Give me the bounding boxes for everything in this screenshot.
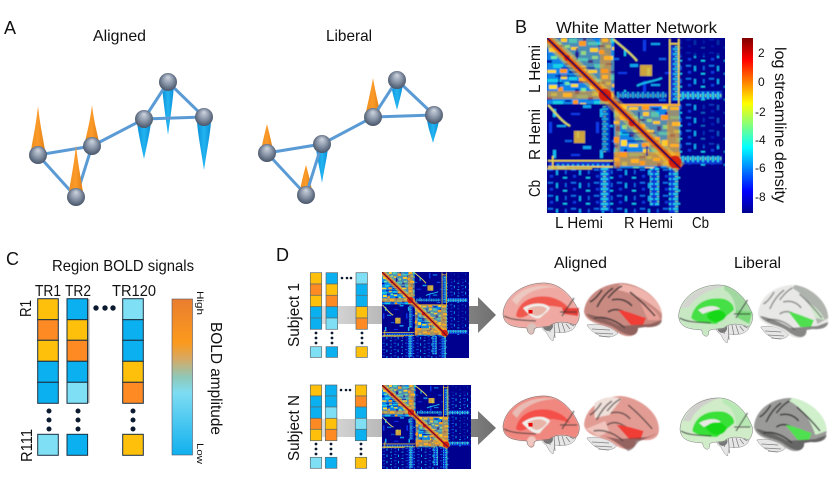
subject N signal columns bbox=[310, 385, 367, 468]
column labels bbox=[35, 283, 156, 300]
panel letter A: A bbox=[4, 18, 16, 38]
y axis labels bbox=[527, 45, 544, 197]
subject 1 label: Subject 1 bbox=[286, 283, 303, 347]
heading: Aligned: Aligned bbox=[554, 255, 607, 272]
scale end labels bbox=[195, 291, 205, 465]
subject 1 ellipsis dots bbox=[315, 277, 363, 344]
heading: White Matter Network: White Matter Network bbox=[556, 20, 718, 37]
heading: Region BOLD signals: Region BOLD signals bbox=[52, 258, 194, 275]
brains: subject 1 aligned bbox=[503, 283, 662, 341]
subject 1 signal columns bbox=[310, 273, 367, 357]
BOLD amplitude scale bbox=[172, 299, 192, 455]
y axis labels: R Hemi bbox=[527, 109, 544, 160]
time series columns bbox=[38, 299, 143, 455]
column labels: TR1 bbox=[35, 283, 61, 300]
colour bar tick labels: -8 bbox=[755, 190, 766, 204]
panel letter B: B bbox=[515, 17, 527, 37]
colour bar tick labels: -2 bbox=[755, 105, 766, 119]
scale end labels: Low bbox=[195, 443, 205, 465]
column labels: TR2 bbox=[65, 283, 91, 300]
row labels: R111 bbox=[19, 429, 36, 462]
row labels: R1 bbox=[18, 300, 35, 317]
colour bar tick labels: -6 bbox=[755, 161, 766, 175]
heading: Aligned: Aligned bbox=[93, 28, 146, 45]
colour bar tick labels: 0 bbox=[758, 75, 765, 89]
subject 1 matrix bbox=[382, 272, 469, 358]
network: aligned bbox=[29, 73, 213, 206]
y axis labels: Cb bbox=[527, 180, 544, 197]
colour bar tick labels: -4 bbox=[755, 133, 766, 147]
panel D: subject pipelines bbox=[276, 245, 828, 469]
panel letter D: D bbox=[276, 245, 289, 265]
subject N label: Subject N bbox=[286, 395, 303, 461]
colour bar tick labels bbox=[755, 46, 766, 204]
brains: subject N aligned bbox=[503, 396, 659, 454]
colour bar title: log streamline density bbox=[771, 47, 788, 203]
x axis labels: Cb bbox=[692, 215, 709, 232]
panel A: aligned and liberal network diagrams bbox=[4, 18, 443, 206]
ellipsis dots bbox=[46, 305, 136, 432]
arrow: subject N bbox=[322, 411, 496, 445]
panel C: region BOLD signals bbox=[6, 249, 224, 465]
y axis labels: L Hemi bbox=[527, 45, 544, 93]
brains: subject 1 liberal bbox=[679, 285, 828, 343]
brains: subject N liberal bbox=[680, 398, 827, 456]
column labels: TR120 bbox=[112, 283, 156, 300]
connectivity matrix heatmap bbox=[547, 38, 725, 213]
heading: Liberal: Liberal bbox=[326, 28, 372, 45]
row labels bbox=[18, 300, 36, 462]
arrow: subject 1 bbox=[322, 297, 496, 333]
scale end labels: High bbox=[195, 291, 205, 315]
scale title: BOLD amplitude bbox=[207, 322, 224, 435]
panel B: white matter network matrix bbox=[515, 17, 788, 232]
x axis labels: R Hemi bbox=[624, 215, 673, 232]
subject N matrix bbox=[382, 385, 471, 469]
network: liberal bbox=[258, 71, 443, 204]
panel letter C: C bbox=[6, 249, 19, 269]
colour bar tick labels: 2 bbox=[758, 46, 765, 60]
heading: Liberal: Liberal bbox=[734, 255, 781, 272]
colour bar bbox=[742, 38, 753, 213]
x axis labels: L Hemi bbox=[555, 215, 603, 232]
x axis labels bbox=[555, 215, 709, 232]
subject N ellipsis dots bbox=[315, 389, 362, 455]
